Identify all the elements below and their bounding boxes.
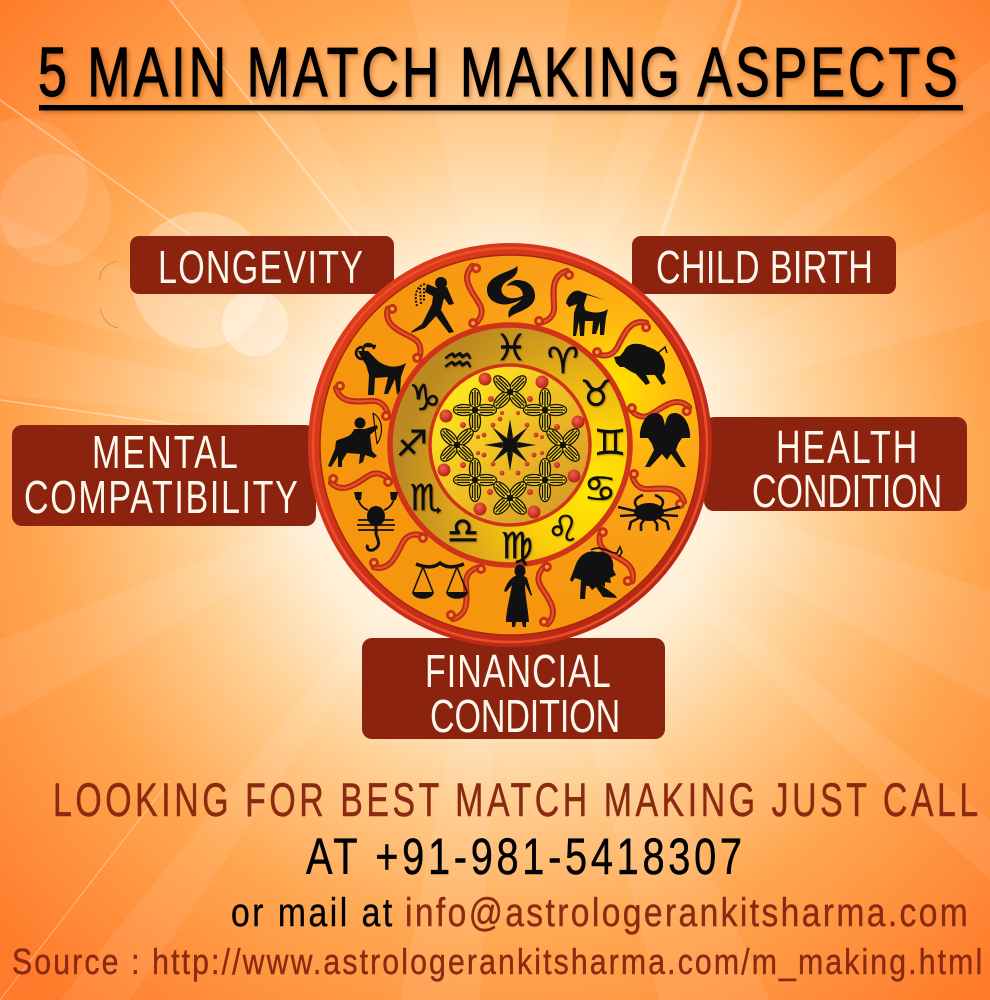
mail line: or mail at (231, 890, 392, 935)
zodiac wheel (308, 243, 712, 647)
label: health condition: HEALTH (776, 421, 917, 473)
label: mental compatibility: COMPATIBILITY (24, 471, 298, 523)
phone number: AT +91-981-5418307 (306, 828, 742, 885)
icon: leo lion (570, 547, 622, 599)
wheel rings (308, 243, 712, 647)
inner ring zodiac symbols (396, 328, 626, 567)
label: mental compatibility: MENTAL (92, 426, 238, 478)
inner ring zodiac symbols: ♊︎ (594, 423, 626, 464)
icon: pisces fish (487, 266, 535, 318)
icon: goat (566, 291, 608, 336)
label: mental compatibility (12, 425, 316, 526)
label: child birth: CHILD BIRTH (656, 241, 873, 293)
inner ring zodiac symbols: ♌︎ (547, 509, 579, 550)
title: 5 MAIN MATCH MAKING ASPECTS (38, 33, 958, 112)
label: health condition (704, 417, 967, 517)
icon: aries ram (356, 344, 406, 395)
icon: libra scales (412, 563, 468, 599)
mandala sun (484, 419, 536, 471)
label: longevity: LONGEVITY (158, 241, 363, 293)
mandala flowers (427, 362, 593, 528)
inner ring zodiac symbols: ♎︎ (447, 511, 479, 552)
source line: Source : http://www.astrologerankitsharma.com/m_making.html (12, 943, 982, 983)
icon: crab (618, 495, 680, 531)
icon: aquarius water bearer (411, 277, 454, 333)
inner ring zodiac symbols: ♈︎ (547, 341, 579, 382)
inner ring zodiac symbols: ♐︎ (396, 424, 428, 465)
red beads (438, 372, 584, 518)
icon: sagittarius archer (328, 413, 382, 467)
icon: gemini twins (640, 413, 690, 467)
inner ring zodiac symbols: ♏︎ (410, 478, 442, 519)
inner ring zodiac symbols: ♍︎ (501, 526, 533, 567)
central mandala (427, 362, 593, 528)
mail line: info@astrologerankitsharma.com (405, 890, 968, 935)
label: financial condition: FINANCIAL (425, 645, 611, 697)
label: financial condition: CONDITION (430, 690, 620, 742)
label: health condition: CONDITION (752, 465, 942, 517)
inner ring zodiac symbols: ♓︎ (495, 328, 527, 369)
icon: scorpion (354, 492, 398, 550)
label: financial condition (362, 638, 665, 742)
icon: bull (614, 344, 667, 385)
call to action text: LOOKING FOR BEST MATCH MAKING JUST CALL (53, 774, 978, 826)
decorative swirls (326, 261, 694, 629)
inner ring zodiac symbols: ♋︎ (584, 469, 616, 510)
inner ring zodiac symbols: ♉︎ (580, 374, 612, 415)
inner ring zodiac symbols: ♒︎ (442, 341, 474, 382)
icon: virgo maiden (504, 564, 532, 627)
inner ring zodiac symbols: ♑︎ (409, 378, 441, 419)
